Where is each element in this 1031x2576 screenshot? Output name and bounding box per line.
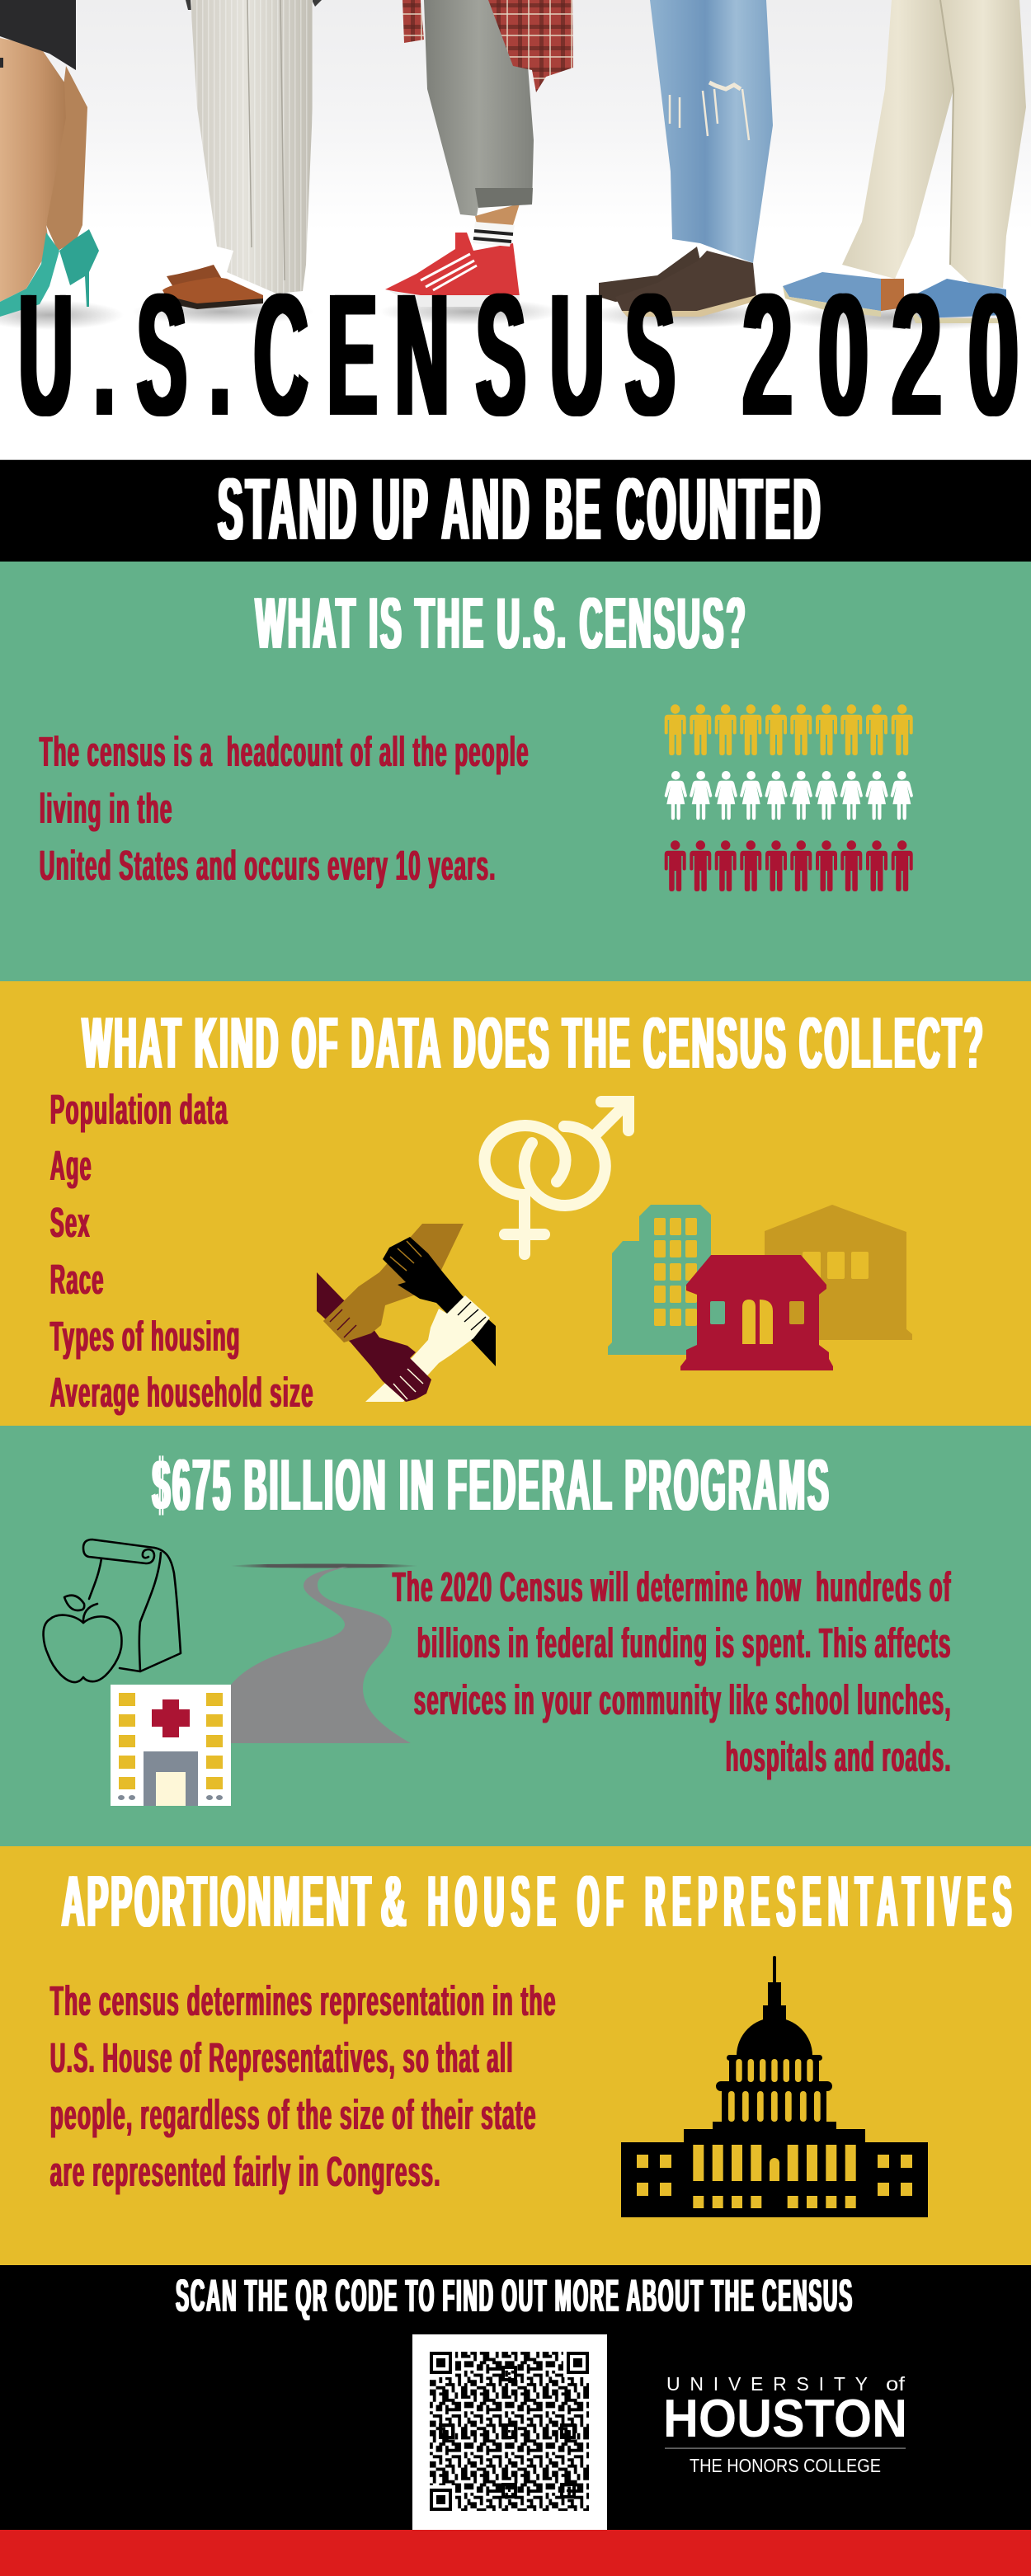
- text: representation explanation: U.S. House of Representatives, so that all: [49, 2034, 513, 2081]
- icon: row of white women: [665, 771, 913, 820]
- text: data list: Age: [49, 1142, 92, 1189]
- text: data list: Sex: [49, 1199, 90, 1246]
- person 3: grey jeans, plaid shirt and red sneaker: [385, 0, 573, 307]
- icon: row of red people: [665, 840, 913, 891]
- logo: University of Houston The Honors College: THE HONORS COLLEGE: [690, 2455, 881, 2476]
- logo: University of Houston The Honors College: [663, 2373, 907, 2476]
- icon: red house: [680, 1255, 833, 1370]
- QR code: [412, 2334, 607, 2530]
- text: census definition: The census is a headcount of all the people: [39, 728, 529, 775]
- text: federal funding explanation: [392, 1563, 951, 1780]
- text: data list: Race: [49, 1256, 104, 1303]
- icon: road: [230, 1563, 418, 1743]
- text: representation explanation: people, regardless of the size of their state: [49, 2091, 536, 2138]
- text: census definition: living in the: [39, 785, 172, 832]
- icon: hospital: [111, 1685, 231, 1806]
- person 2: striped trousers and brown shoes: [162, 0, 322, 309]
- person 5: khaki trousers and blue shoes: [783, 0, 1026, 323]
- logo: University of Houston The Honors College: UNIVERSITY: [666, 2373, 868, 2395]
- panel: footer with QR code and logo: [0, 2265, 1031, 2530]
- text: census definition: United States and occurs every 10 years.: [39, 842, 496, 889]
- panel: apportionment: [0, 1846, 1031, 2265]
- heading: apportionment and house of representatives: APPORTIONMENT: [60, 1860, 372, 1942]
- text: data list: Population data: [49, 1086, 228, 1133]
- panel: what kind of data: [0, 981, 1031, 1426]
- icon: row of yellow people: [665, 704, 913, 755]
- panel: federal programs: [0, 1426, 1031, 1846]
- icon: male and female symbols: [485, 1102, 628, 1254]
- panel: what is the U.S. census: [0, 562, 1031, 981]
- text: representation explanation: are represented fairly in Congress.: [49, 2148, 440, 2195]
- shoe shadows: [0, 298, 1023, 331]
- icon: four linked hands: [317, 1224, 496, 1402]
- title: U.S. CENSUS 2020: [16, 257, 1016, 452]
- title: U.S. CENSUS 2020: 2020: [740, 257, 1016, 452]
- text: representation explanation: [49, 1977, 556, 2195]
- panel: subtitle band: [0, 459, 1031, 562]
- person 4: ripped blue jeans and brown boots: [599, 0, 773, 317]
- title: U.S. CENSUS 2020: U.S.CENSUS: [16, 258, 673, 452]
- logo: University of Houston The Honors College: HOUSTON: [663, 2388, 907, 2448]
- icon: lunch bag: [83, 1539, 181, 1671]
- icon: teal office building: [608, 1205, 711, 1355]
- text: data list: Types of housing: [49, 1313, 240, 1360]
- panel: hero photo and title: [0, 0, 1031, 460]
- text: data list: [49, 1086, 313, 1416]
- heading: apportionment and house of representatives: &: [379, 1860, 407, 1942]
- icon: capitol building: [621, 1956, 928, 2217]
- text: data list: Average household size: [49, 1369, 313, 1416]
- bottom red band: [0, 2530, 1031, 2576]
- hero background: [0, 0, 1031, 460]
- icon: tan building: [759, 1205, 912, 1340]
- person 1: legs and teal heels: [0, 0, 99, 317]
- icon: apple: [44, 1596, 121, 1682]
- text: representation explanation: The census determines representation in the: [49, 1977, 556, 2024]
- text: census definition: [39, 728, 529, 889]
- logo: University of Houston The Honors College: of: [886, 2373, 906, 2395]
